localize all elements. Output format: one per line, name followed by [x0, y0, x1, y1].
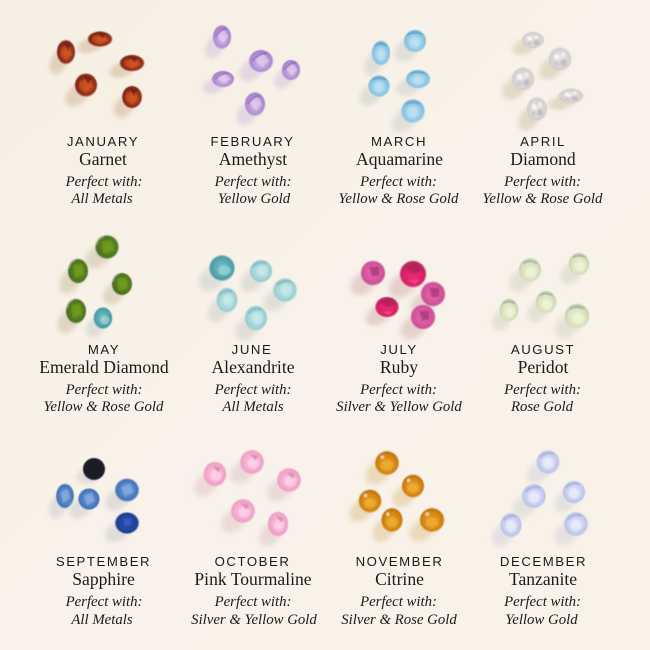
panel: April Diamond	[483, 32, 603, 207]
panel: June Alexandrite	[194, 256, 296, 415]
panel: November Citrine	[341, 451, 457, 628]
label: June text: All Metals	[221, 399, 284, 415]
label: May text	[39, 342, 169, 415]
label: October text: Perfect with:	[214, 594, 291, 610]
label: July text: Perfect with:	[359, 382, 437, 398]
panel: July Ruby	[336, 261, 462, 415]
label: November text: Citrine	[375, 569, 424, 589]
label: April text	[483, 134, 603, 207]
label: March text	[339, 134, 459, 207]
label: September text	[56, 554, 151, 628]
label: April text: Yellow & Rose Gold	[483, 191, 603, 207]
panel: October Pink Tourmaline	[190, 450, 317, 628]
label: May text: Perfect with:	[65, 382, 142, 398]
label: January text: JANUARY	[67, 134, 139, 149]
label: August text: Perfect with:	[503, 382, 581, 398]
gems: amethyst	[198, 26, 300, 130]
label: June text: Perfect with:	[214, 382, 291, 398]
label: June text: JUNE	[232, 342, 272, 357]
label: March text: Aquamarine	[356, 149, 443, 169]
gems: emerald diamond	[53, 236, 132, 342]
label: February text: FEBRUARY	[211, 134, 294, 149]
panel: September Sapphire	[45, 458, 151, 628]
label: February text: Yellow Gold	[218, 191, 291, 207]
label: December text: DECEMBER	[500, 554, 587, 569]
panel: May Emerald Diamond	[39, 236, 169, 415]
gems: garnet	[46, 32, 144, 122]
label: January text: All Metals	[70, 191, 133, 207]
panel: March Aquamarine	[339, 30, 459, 207]
label: May text: MAY	[88, 342, 120, 357]
gems: ruby	[346, 261, 445, 344]
label: August text: AUGUST	[511, 342, 575, 357]
label: August text: Peridot	[518, 357, 569, 377]
label: September text: All Metals	[70, 612, 133, 628]
label: February text: Amethyst	[219, 149, 287, 169]
label: June text: Alexandrite	[211, 357, 295, 377]
label: December text: Yellow Gold	[505, 612, 578, 628]
label: June text	[211, 342, 295, 415]
gems: citrine	[345, 451, 444, 547]
label: October text: OCTOBER	[215, 554, 290, 569]
gems: aquamarine	[355, 30, 430, 137]
label: December text: Tanzanite	[509, 569, 577, 589]
panel: August Peridot	[488, 253, 589, 415]
label: July text: Ruby	[380, 357, 418, 377]
label: April text: Perfect with:	[503, 174, 581, 190]
label: July text: Silver & Yellow Gold	[336, 399, 462, 415]
label: July text: JULY	[380, 342, 418, 357]
label: April text: APRIL	[520, 134, 566, 149]
label: May text: Emerald Diamond	[39, 357, 169, 377]
label: September text: Perfect with:	[65, 594, 142, 610]
label: March text: Yellow & Rose Gold	[339, 191, 459, 207]
label: September text: SEPTEMBER	[56, 554, 151, 569]
label: May text: Yellow & Rose Gold	[44, 399, 164, 415]
label: April text: Diamond	[510, 149, 576, 169]
label: February text: Perfect with:	[214, 174, 291, 190]
label: January text: Garnet	[79, 149, 127, 169]
label: March text: Perfect with:	[359, 174, 437, 190]
panel: December Tanzanite	[487, 450, 588, 628]
label: August text	[503, 342, 581, 415]
label: March text: MARCH	[371, 134, 427, 149]
gems: tanzanite	[487, 450, 588, 552]
label: January text	[65, 134, 142, 207]
label: December text: Perfect with:	[503, 594, 581, 610]
label: November text: Silver & Rose Gold	[341, 612, 457, 628]
label: November text: Perfect with:	[359, 594, 437, 610]
panel: February Amethyst	[198, 26, 300, 207]
label: October text: Pink Tourmaline	[194, 569, 312, 589]
gems: alexandrite	[194, 256, 296, 345]
label: October text	[191, 554, 317, 628]
label: September text: Sapphire	[72, 569, 135, 589]
gems: pink tourmaline	[190, 450, 301, 551]
label: October text: Silver & Yellow Gold	[191, 612, 317, 628]
label: November text	[341, 554, 457, 628]
label: July text	[336, 342, 462, 415]
label: January text: Perfect with:	[65, 174, 142, 190]
label: November text: NOVEMBER	[356, 554, 443, 569]
label: August text: Rose Gold	[510, 399, 574, 415]
gems: peridot	[488, 253, 589, 343]
label: December text	[500, 554, 587, 628]
gems: sapphire	[45, 458, 139, 547]
gems: diamond	[498, 32, 583, 135]
gem: dark sapphire	[76, 458, 105, 484]
panel: January Garnet	[46, 32, 144, 207]
label: February text	[211, 134, 294, 207]
